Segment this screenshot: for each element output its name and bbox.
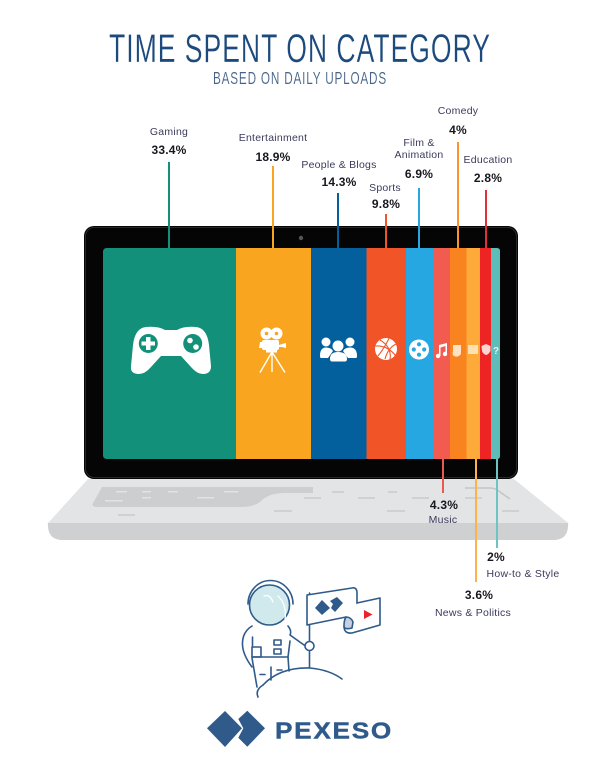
label: film and animation: Film & — [403, 137, 435, 149]
label: news and politics: News & Politics — [435, 607, 511, 619]
label: music — [429, 498, 458, 526]
label: gaming: 33.4% — [151, 143, 187, 157]
icon: film reel — [409, 340, 429, 360]
laptop screen bezel — [84, 226, 518, 479]
astronaut with flag — [242, 580, 380, 697]
logo — [207, 711, 393, 747]
icon: basketball — [375, 338, 397, 360]
leader lines — [169, 142, 497, 582]
label: entertainment — [239, 132, 307, 164]
label: people and blogs: People & Blogs — [301, 159, 377, 171]
flag — [307, 588, 357, 625]
ground — [263, 668, 342, 685]
stacked share bar — [103, 248, 500, 459]
label: sports: 9.8% — [372, 197, 400, 211]
label: music: 4.3% — [430, 498, 458, 512]
icon: game controller — [131, 327, 211, 374]
label: comedy: Comedy — [438, 105, 479, 117]
icon: graduation — [482, 344, 490, 355]
body — [242, 626, 304, 687]
label: film and animation — [395, 137, 443, 181]
label: how-to and style: How-to & Style — [487, 568, 559, 580]
label: education: 2.8% — [474, 171, 502, 185]
label: news and politics — [435, 588, 511, 619]
subtitle: BASED ON DAILY UPLOADS — [213, 68, 387, 88]
logo wordmark: PEXESO — [275, 718, 393, 744]
logo mark — [207, 711, 265, 747]
label: comedy — [438, 105, 479, 137]
icon: news — [468, 345, 478, 354]
label: education — [464, 154, 512, 185]
icon: people — [320, 338, 357, 362]
label: people and blogs — [301, 159, 377, 189]
helmet — [248, 580, 293, 625]
label: education: Education — [464, 154, 512, 166]
icon: comedy masks — [453, 345, 461, 357]
label: how-to and style: 2% — [487, 550, 505, 564]
label: how-to and style — [487, 550, 559, 580]
label: film and animation: Animation — [395, 149, 443, 161]
label: gaming: Gaming — [150, 126, 188, 138]
label: news and politics: 3.6% — [465, 588, 493, 602]
label: gaming — [150, 126, 188, 157]
flag pole — [308, 593, 310, 668]
label: entertainment: Entertainment — [239, 132, 307, 144]
flag marks — [315, 597, 372, 619]
label: sports: Sports — [369, 182, 401, 194]
laptop base — [48, 479, 568, 540]
label: entertainment: 18.9% — [255, 150, 291, 164]
label: people and blogs: 14.3% — [321, 175, 357, 189]
label: film and animation: 6.9% — [405, 167, 433, 181]
label: comedy: 4% — [449, 123, 467, 137]
label: music: Music — [429, 514, 457, 526]
label: sports — [369, 182, 401, 211]
icon: film camera — [259, 328, 286, 372]
icon: music note — [436, 343, 447, 358]
icon: question mark: ? — [493, 346, 499, 357]
